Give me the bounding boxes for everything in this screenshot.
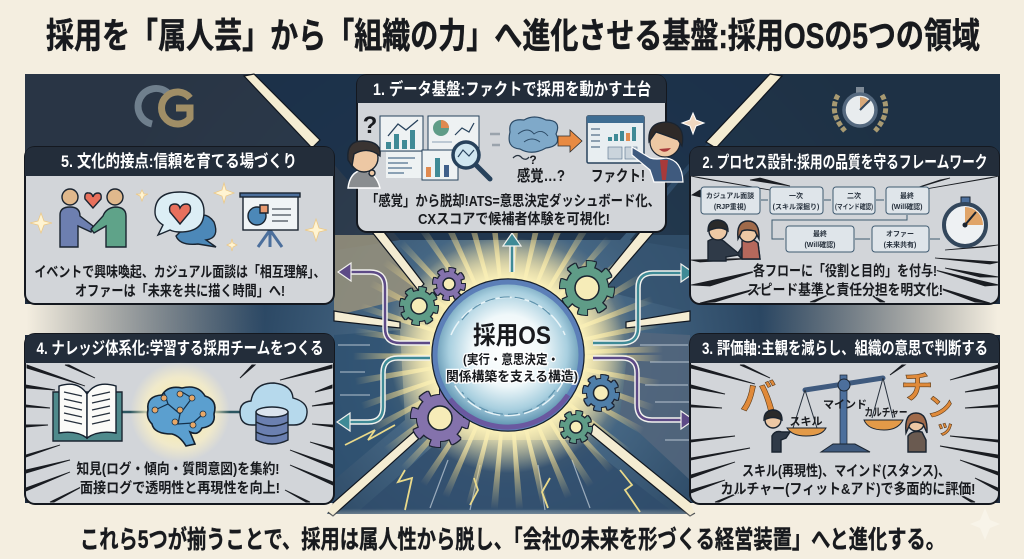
orange arrow [558,130,582,152]
icon: two people on scale [764,410,927,452]
icon: pointing person [632,122,683,182]
connector arrows [347,244,683,422]
core text: 採用OS [473,322,551,350]
panel 5: culture touchpoints: オファーは「未来を共に描く時間」へ! [75,282,285,300]
process flow: (Will確認) [804,240,836,249]
core text [446,322,578,384]
onomatopoeia: ッ [936,418,954,438]
onomatopoeia [740,369,954,438]
icon: question mark: ? [363,112,377,139]
process flow: (マインド確認) [835,202,873,211]
logo emblem: CG [138,88,190,124]
panel 4: knowledge: 面接ログで透明性と再現性を向上! [80,479,280,497]
process flow: 二次 [847,191,861,200]
process flow: (RJP重視) [714,202,746,211]
speed lines [691,176,999,303]
panel text: イベントで興味喚起、カジュアル面談は「相互理解」、 [34,263,326,281]
fade to paper [0,304,1024,559]
panel 5: culture touchpoints [25,147,334,304]
icon: cloud database [240,383,307,444]
connectors [120,411,240,413]
panel text: 知見(ログ・傾向・質問意図)を集約! [76,460,280,478]
scale labels [790,398,908,428]
icon: stopwatch [944,197,986,246]
icon: report cards [380,116,479,180]
process flow: (未来共有) [884,240,916,249]
scale labels: マインド [823,398,867,411]
heading: 1. データ基盤:ファクトで採用を動かす土台 [373,79,651,99]
icon: presentation board [240,193,300,247]
panel 1: data foundation: CXスコアで候補者体験を可視化! [418,210,610,228]
process flow: (Will確認) [891,202,923,211]
label: intuition: 感覚…? [517,166,565,185]
emblem: stopwatch with laurel [834,87,886,131]
onomatopoeia: バ [740,377,776,418]
scale labels: スキル [790,416,822,428]
speed lines [26,365,333,502]
icon: speech bubbles [155,192,216,247]
process flow [701,187,940,252]
dark burst background [25,74,1000,514]
icon: glowing brain [130,362,230,462]
icon: magnifier [453,142,490,179]
panel 2: process design [690,147,999,304]
icon: brain with question [490,117,558,167]
icon: open book [53,384,122,441]
icon: two people [708,220,760,261]
process flow: カジュアル面談 [706,191,754,200]
heading: 5. 文化的接点:信頼を育てる場づくり [61,152,297,171]
icon: thinking person [348,141,380,188]
sparkle [682,113,704,134]
sparkle watermark [970,508,1000,540]
cream rays [244,74,782,516]
panel text: スキル(再現性)、マインド(スタンス)、 [742,463,950,480]
panel 3: evaluation axes [690,334,999,504]
scale labels: カルチャー [864,406,908,419]
panel 2: process design: スピード基準と責任分担を明文化! [747,281,943,299]
sparkles [30,183,327,251]
onomatopoeia: ン [927,392,953,422]
glass ring [432,279,584,431]
icon: brain with question: ? [529,153,537,167]
icon: handshake [60,189,126,247]
core text: (実行・意思決定・ [463,352,559,367]
process flow: 一次 [789,191,803,200]
lightning bolts [345,425,640,512]
panel text: 各フローに「役割と目的」を付与! [753,262,937,280]
core text: 関係構築を支える構造) [446,369,578,384]
process flow: オファー [886,230,914,238]
speed lines [691,365,998,502]
gears [403,265,616,443]
process flow: 最終 [813,229,827,238]
panel 1: data foundation [348,75,683,232]
panel 4: knowledge [25,334,334,504]
panel 3: evaluation axes: カルチャー(フィット&アド)で多面的に評価! [720,480,976,498]
process flow: (スキル深掘り) [773,202,819,211]
icon: balance scale [787,375,903,452]
process flow: 最終 [900,191,914,200]
panel text: 「感覚」から脱却!ATS=意思決定ダッシュボード化、 [366,192,660,210]
onomatopoeia: チ [901,369,933,405]
core: 採用OS hub [337,233,694,443]
icon: dashboard [587,116,644,163]
label: fact: ファクト! [591,167,645,185]
heading: 4. ナレッジ体系化:学習する採用チームをつくる [36,338,324,358]
